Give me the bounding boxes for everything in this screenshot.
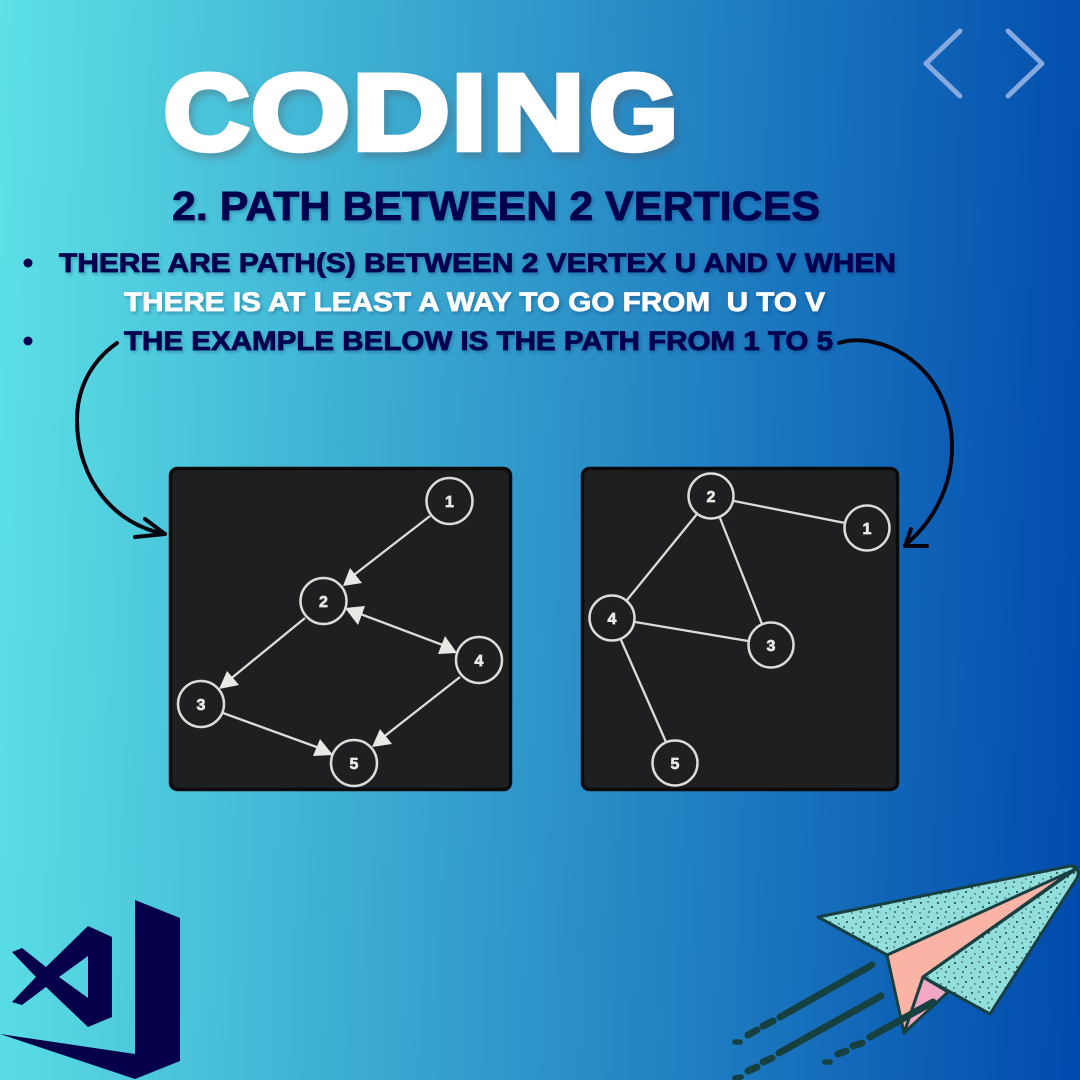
motion lines xyxy=(735,965,933,1078)
node 5 xyxy=(652,740,698,786)
node 5: 5 xyxy=(350,756,359,773)
node 3 xyxy=(748,622,794,668)
node 1: 1 xyxy=(445,494,454,511)
arrow: right curve xyxy=(839,340,952,546)
node 2: 2 xyxy=(707,489,716,506)
title xyxy=(164,52,678,172)
line 1: THERE ARE PATH(S) BETWEEN 2 VERTEX U AND V WHEN xyxy=(59,248,896,278)
edges and arrowheads xyxy=(219,516,460,756)
arrow: left curve xyxy=(77,343,165,537)
node 3: 3 xyxy=(767,638,776,655)
bullet 2 xyxy=(24,336,32,346)
subtitle: 2. PATH BETWEEN 2 VERTICES xyxy=(172,183,820,229)
panel: directed graph xyxy=(170,468,510,790)
icon: navigation chevrons xyxy=(926,31,1042,96)
node 1: 1 xyxy=(863,521,872,538)
node 5: 5 xyxy=(671,756,680,773)
node 3 xyxy=(178,681,224,727)
icon: paper plane xyxy=(735,866,1078,1078)
line 3: THE EXAMPLE BELOW IS THE PATH FROM 1 TO 5 xyxy=(124,326,833,356)
node 3: 3 xyxy=(197,697,206,714)
text block: definition xyxy=(24,248,896,356)
title: I xyxy=(452,52,486,172)
title: O xyxy=(251,52,350,172)
node 4 xyxy=(590,596,634,640)
plane body xyxy=(887,868,1076,1033)
plane top wing xyxy=(818,866,1076,955)
bullet 1 xyxy=(24,258,32,268)
node 2 xyxy=(300,578,346,624)
node 4: 4 xyxy=(608,611,617,628)
node 1 xyxy=(426,478,472,524)
node 2: 2 xyxy=(319,594,328,611)
title: N xyxy=(492,52,584,172)
title: G xyxy=(589,52,678,172)
node 4: 4 xyxy=(475,653,484,670)
plane pink fold xyxy=(904,977,948,1033)
line 2: THERE IS AT LEAST A WAY TO GO FROM U TO V xyxy=(124,287,825,317)
edges xyxy=(621,501,845,742)
title: C xyxy=(164,52,250,172)
node 4 xyxy=(456,637,502,683)
node 2 xyxy=(688,474,734,518)
node 5 xyxy=(331,740,377,786)
plane right wing xyxy=(923,869,1078,1014)
node 1 xyxy=(844,506,890,550)
panel: undirected graph xyxy=(582,468,898,790)
icon: Visual Studio logo xyxy=(0,900,180,1079)
title: D xyxy=(352,52,450,172)
